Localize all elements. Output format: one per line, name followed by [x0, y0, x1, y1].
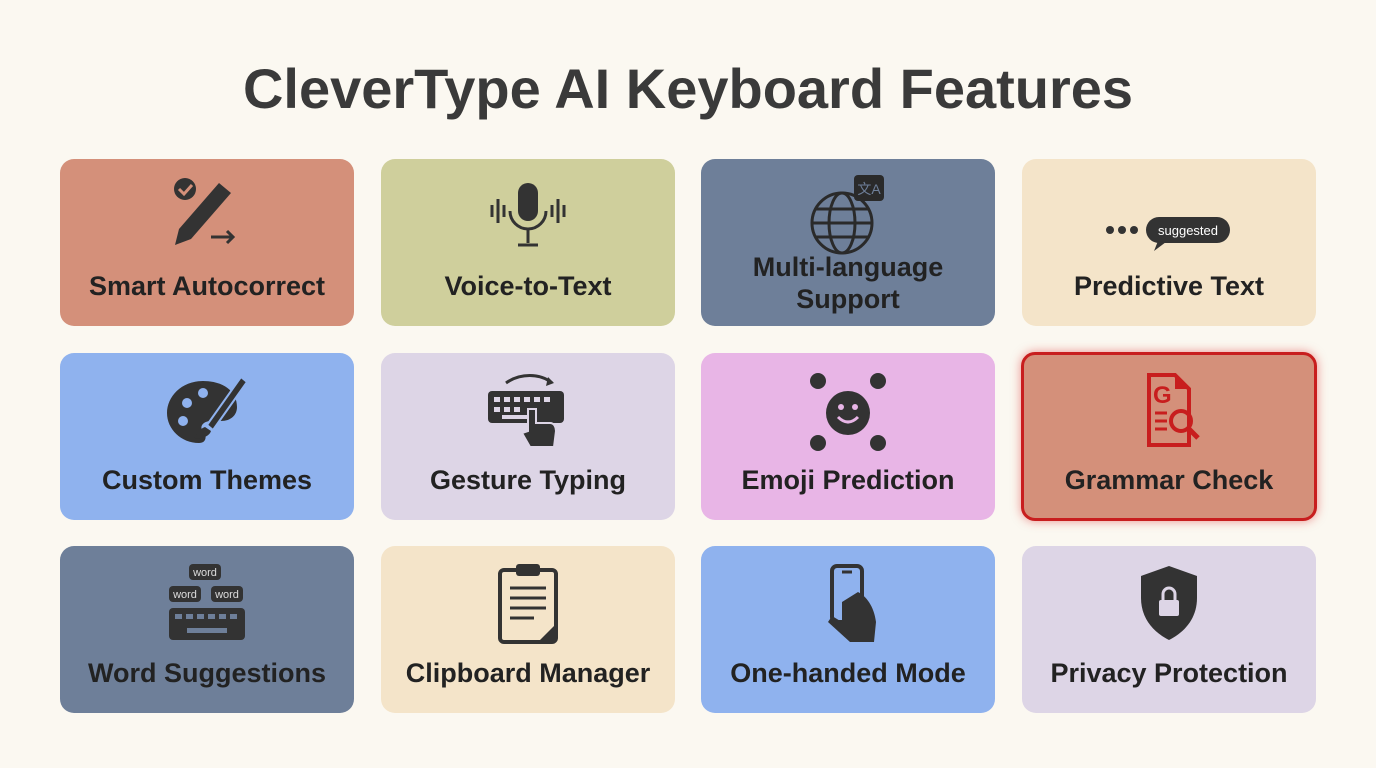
icon: hand holding phone	[828, 564, 876, 642]
icon: suggestion bubble: suggested	[1158, 223, 1218, 238]
card: Grammar Check (highlighted)	[1021, 352, 1317, 521]
card: Voice-to-Text	[381, 159, 675, 326]
label: Privacy Protection	[1050, 658, 1288, 688]
icon: word bubbles keyboard	[169, 564, 245, 640]
label: Custom Themes	[102, 465, 312, 495]
card: Multi-language Support	[701, 159, 995, 326]
label: Smart Autocorrect	[89, 271, 325, 301]
icon: word bubbles keyboard: word	[214, 589, 239, 601]
icon: word bubbles keyboard: word	[192, 567, 217, 579]
title: CleverType AI Keyboard Features	[243, 57, 1133, 120]
icon: clipboard	[498, 564, 558, 644]
card: One-handed Mode	[701, 546, 995, 713]
label: Predictive Text	[1074, 271, 1264, 301]
icon: emoji faces	[810, 373, 886, 451]
icon: globe: 文A	[857, 181, 881, 197]
card: Smart Autocorrect	[60, 159, 354, 326]
icon: pencil with check	[174, 178, 235, 245]
label: Grammar Check	[1065, 465, 1273, 495]
icon: document G magnifier	[1147, 373, 1200, 447]
icon: keyboard with hand	[488, 374, 564, 446]
card: Predictive Text	[1022, 159, 1316, 326]
icon: suggestion bubble	[1106, 217, 1230, 251]
card: Emoji Prediction	[701, 353, 995, 520]
label: Gesture Typing	[430, 465, 626, 495]
card: Privacy Protection	[1022, 546, 1316, 713]
card: Clipboard Manager	[381, 546, 675, 713]
icon: globe	[810, 175, 884, 254]
label: Multi-language	[753, 252, 943, 282]
card: Gesture Typing	[381, 353, 675, 520]
icon: microphone	[490, 183, 566, 246]
card: Word Suggestions	[60, 546, 354, 713]
card: Custom Themes	[60, 353, 354, 520]
label: Word Suggestions	[88, 658, 326, 688]
label: Voice-to-Text	[444, 271, 612, 301]
icon: palette	[167, 378, 246, 443]
label	[753, 252, 943, 314]
icon: word bubbles keyboard: word	[172, 589, 197, 601]
label: Clipboard Manager	[406, 658, 650, 688]
label: Emoji Prediction	[741, 465, 955, 495]
label: Support	[796, 284, 900, 314]
icon: document G magnifier: G	[1153, 382, 1172, 409]
icon: shield lock	[1141, 566, 1197, 640]
label: One-handed Mode	[730, 658, 966, 688]
